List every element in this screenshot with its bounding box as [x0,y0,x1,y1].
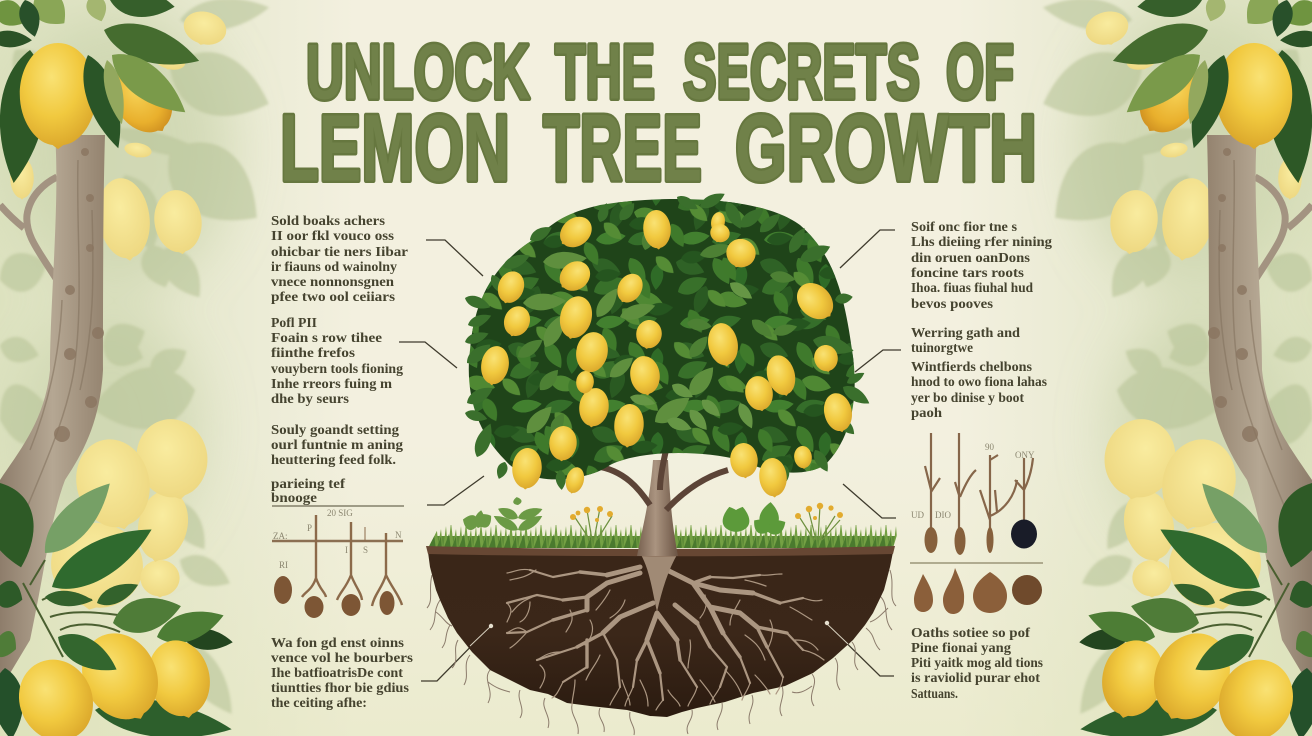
diagram labels: N [395,530,402,540]
diagram labels: 90 [985,442,994,452]
text block: left one: Sold boaks achers [271,213,385,228]
text block: left three: parieing tef [271,476,346,491]
title line two: GROWTH [735,96,1037,202]
seedling stems [925,433,1033,550]
text block: left one: pfee two ool ceiiars [271,289,395,304]
text block: right two: tuinorgtwe [911,340,973,355]
soil markers [470,621,848,646]
small plants [460,496,843,540]
central lemon tree illustration [426,189,900,735]
text block: left three: ourl funtnie m aning [271,437,403,452]
fine hair roots [427,570,896,735]
top leaves [0,0,204,186]
diagram labels: I [345,545,348,555]
text block: right two: Wintfierds chelbons [911,359,1032,374]
bottom leaves [0,473,234,736]
text block: right two: paoh [911,405,943,420]
text block: right bottom: Oaths sotiee so pof [911,625,1031,640]
text block: left three [271,422,403,505]
text block: left one: II oor fkl vouco oss [271,228,394,243]
right growth diagram [910,433,1043,614]
text block: right two: hnod to owo fiona lahas [911,374,1047,389]
right side botanical border [1033,0,1312,736]
text block: left two: Pofl PII [271,315,317,330]
soil [428,552,893,717]
left side botanical border [0,0,279,736]
diagram labels: 20 SIG [327,508,353,518]
canopy [469,199,855,479]
diagram labels [273,508,402,570]
title line one: UNLOCK [306,28,530,116]
text block: right bottom: Piti yaitk mog ald tions [911,655,1043,670]
overlapping leaf [51,625,123,682]
text block: left one: ir fiauns od wainolny [271,259,397,274]
text block: right one: din oruen oanDons [911,250,1030,265]
text block: left three: bnooge [271,490,317,505]
title line one: SECRETS [683,28,920,116]
pale lemons [10,7,230,618]
side branch [0,177,57,280]
text block: right one: Soif onc fior tne s [911,219,1017,234]
diagram seeds [274,576,394,618]
canopy front leaves [521,250,720,438]
text block: left bottom: the ceiting afhe: [271,695,367,710]
text block: right one: foncine tars roots [911,265,1024,280]
text block: right one: Lhs dieiing rfer nining [911,234,1052,249]
text block: right two: Werring gath and [911,325,1021,340]
title line one: THE [555,28,655,116]
seed row [914,568,1042,614]
text block: left two [271,315,403,406]
text block: right bottom [911,625,1043,701]
text block: left bottom: tiuntties fhor bie gdius [271,680,409,695]
diagram labels: P [307,523,312,533]
orange lemon [100,53,186,146]
text block: right one: bevos pooves [911,296,993,311]
text block: left two: fiinthe frefos [271,345,355,360]
text block: left bottom: Ihe batfioatrisDe cont [271,665,404,680]
diagram labels: DIO [935,510,951,520]
dark root ball [1011,520,1037,548]
diagram labels [911,442,1035,520]
roots [507,553,824,710]
text block: right one [911,219,1052,311]
diagram labels: ONY [1015,450,1035,460]
bottom lemons [7,621,218,736]
text block: left one: vnece nonnonsgnen [271,274,395,289]
text block: left two: Foain s row tihee [271,330,382,345]
left root diagram [272,506,404,618]
diagram labels: ZA: [273,531,288,541]
text block: right two [911,325,1047,420]
title line two: TREE [543,96,702,202]
text block: left two: dhe by seurs [271,391,349,406]
title line one: OF [946,28,1014,116]
diagram labels: UD [911,510,924,520]
text block: left one [271,213,408,304]
text block: left one: ohicbar tie ners Iibar [271,244,408,259]
title line two: LEMON [280,96,510,202]
twigs [23,560,120,657]
soil top band [426,546,895,556]
flower stems [574,506,840,540]
diagram labels: RI [279,560,288,570]
text block: left bottom: Wa fon gd enst oinns [271,635,404,650]
trunk [0,135,105,690]
text block: right bottom: is raviolid purar ehot [911,670,1041,685]
fine root ends [507,569,824,710]
text block: left bottom: vence vol he bourbers [271,650,413,665]
text block: left three: Souly goandt setting [271,422,399,437]
text block: right bottom: Sattuans. [911,686,958,701]
text block: right bottom: Pine fionai yang [911,640,1011,655]
faded background leaves [0,0,279,723]
trunk and branches [595,450,728,556]
title line one [306,28,1014,116]
connector lines [399,230,901,681]
canopy outer leaves [463,189,873,490]
seedling bulbs [924,527,994,555]
text block: right two: yer bo dinise y boot [911,390,1025,405]
grass [428,525,900,548]
diagram stems [302,515,402,606]
big top lemon [20,43,96,149]
diagram labels: S [363,545,368,555]
text block: left two: Inhe rreors fuing m [271,376,393,391]
lemons [478,209,856,499]
text block: left two: vouybern tools fioning [271,361,403,376]
text block: left three: heuttering feed folk. [271,452,396,467]
front top leaves [74,42,196,153]
text block: right one: Ihoa. fiuas fiuhal hud [911,280,1033,295]
text block: left bottom [271,635,413,710]
yellow flowers [570,503,843,522]
title [280,28,1037,202]
title line two [280,96,1037,202]
